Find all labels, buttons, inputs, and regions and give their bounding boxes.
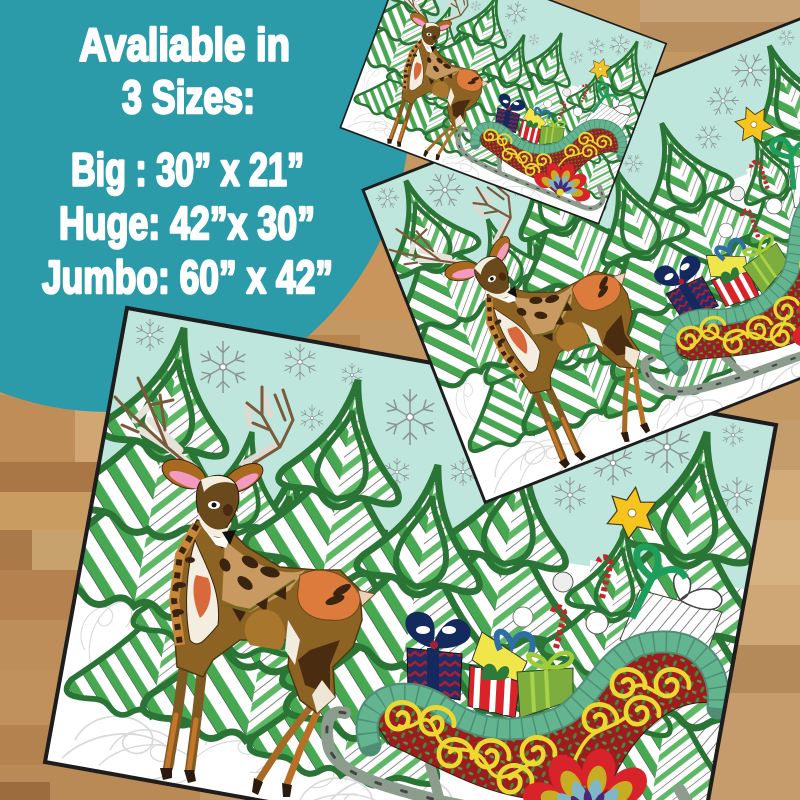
poster border xyxy=(45,308,776,800)
neck pattern xyxy=(174,525,197,645)
haunch xyxy=(245,610,285,650)
yellow gift xyxy=(472,632,527,688)
back pattern xyxy=(222,540,305,612)
legs xyxy=(167,665,318,784)
size: huge: Huge: 42”x 30” xyxy=(59,197,315,249)
size: jumbo: Jumbo: 60” x 42” xyxy=(42,251,333,303)
white gift with green bow xyxy=(620,547,722,672)
teal circle panel xyxy=(0,0,410,412)
heading line 1: Avaliable in xyxy=(79,18,290,70)
sleigh body xyxy=(375,648,712,800)
pine trees xyxy=(27,309,800,800)
sleigh green trim xyxy=(367,642,718,745)
head xyxy=(196,475,239,548)
size: big: Big : 30” x 21” xyxy=(71,144,304,196)
tail xyxy=(358,590,375,606)
heading and sizes text xyxy=(42,18,333,303)
body xyxy=(172,520,362,713)
candy canes and ornaments xyxy=(513,557,610,648)
gold star xyxy=(606,484,658,542)
poster: large jumbo print xyxy=(0,280,800,800)
runners xyxy=(327,712,694,800)
navy gift xyxy=(407,648,462,700)
sleigh xyxy=(327,642,718,800)
antlers xyxy=(115,378,293,472)
poster: small big print xyxy=(312,0,693,242)
deer xyxy=(115,378,375,797)
fan flower xyxy=(515,736,675,800)
heading line 2: 3 Sizes: xyxy=(122,71,255,123)
ears xyxy=(158,453,268,499)
rump orange patch xyxy=(298,570,360,620)
chest pattern xyxy=(187,540,219,644)
yellow swirls xyxy=(387,669,689,792)
snow swirls xyxy=(62,590,549,800)
gifts xyxy=(405,612,573,718)
snowflakes xyxy=(136,319,753,513)
lined white background behind gifts xyxy=(590,560,748,780)
sky xyxy=(90,308,776,590)
green gift xyxy=(517,668,573,718)
poster: medium huge print xyxy=(274,0,800,605)
hooves xyxy=(160,768,292,797)
red gift xyxy=(468,665,520,718)
